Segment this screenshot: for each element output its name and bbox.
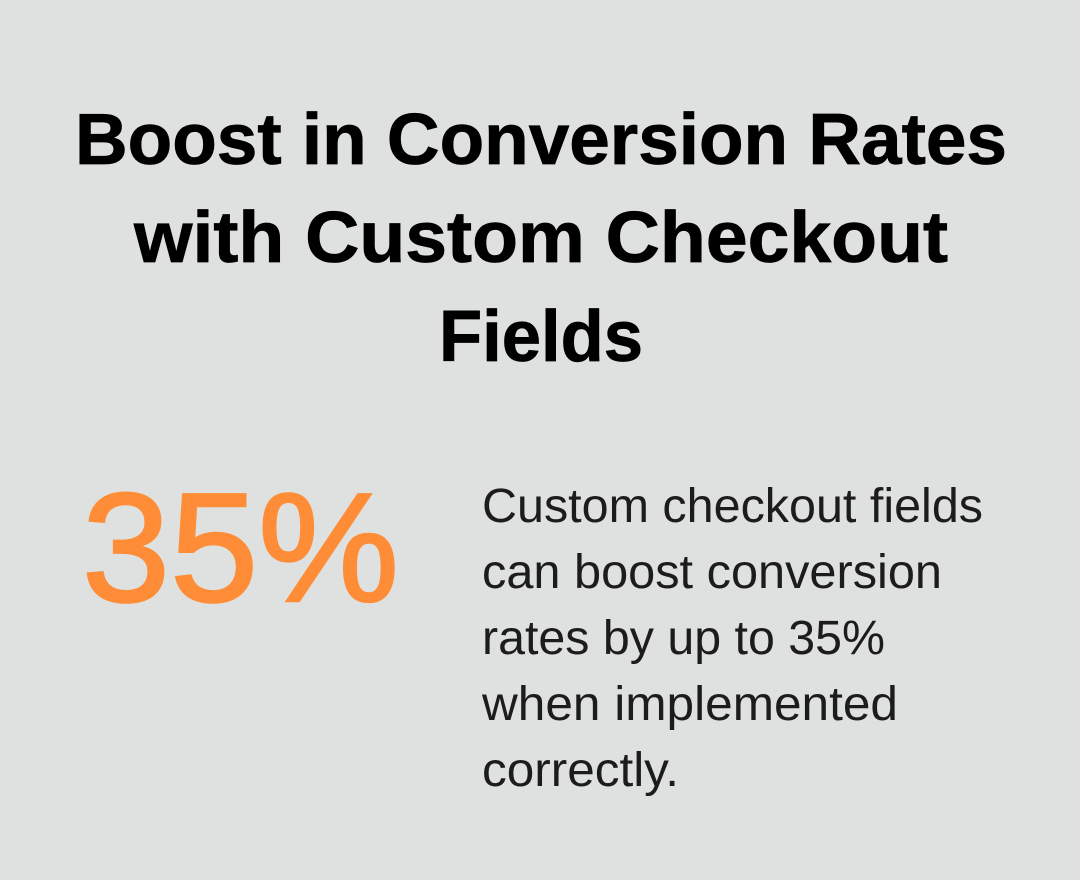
title [75, 100, 1007, 377]
title: Fields [439, 297, 643, 377]
description text: rates by up to 35% [482, 612, 885, 665]
description text: when implemented [481, 678, 898, 731]
description text: can boost conversion [482, 546, 942, 599]
description text [481, 480, 983, 797]
title: with Custom Checkout [133, 198, 948, 278]
statistic: 35%: 35% [82, 461, 399, 634]
title: Boost in Conversion Rates [75, 100, 1007, 180]
description text: Custom checkout fields [482, 480, 983, 533]
description text: correctly. [482, 744, 679, 797]
